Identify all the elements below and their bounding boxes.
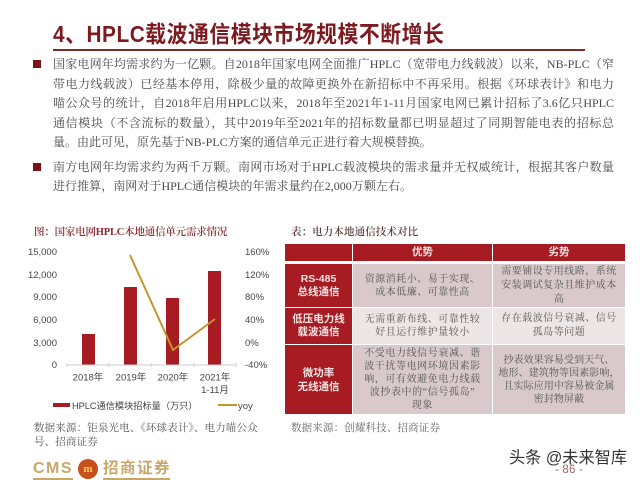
right axis labels: -40% [245, 360, 268, 371]
chart source: 数据来源：钜泉光电、《环球表计》、电力喵公众 [34, 423, 258, 434]
row: RS-485: 成本低廉、可靠性高 [375, 286, 470, 298]
row: micro-power wireless [285, 345, 625, 414]
text block: southern grid demand [33, 160, 614, 193]
row: power line carrier: 存在载波信号衰减、信号 [501, 313, 617, 324]
right axis labels: 160% [245, 247, 270, 258]
header row [285, 244, 625, 261]
right axis labels: 0% [245, 338, 259, 349]
text block: southern grid demand: 进行推算，南网对于HPLC通信模块的年需求量约在2,000万颗左右。 [53, 179, 412, 193]
icon: bullet 2 [33, 163, 41, 171]
row: micro-power wireless: 波抄表中的“信号孤岛” [370, 387, 475, 398]
left axis labels: 3,000 [33, 338, 57, 349]
left axis labels: 9,000 [33, 292, 57, 303]
header row: 劣势 [548, 246, 570, 258]
table source: 数据来源：创耀科技、招商证券 [291, 423, 440, 434]
row: RS-485: 高 [554, 294, 564, 304]
x axis labels: 2018年 [73, 372, 104, 384]
row: RS-485: 安装调试复杂且维护成本 [501, 280, 617, 290]
x axis labels [73, 372, 231, 396]
left axis labels [28, 247, 57, 371]
x axis labels: 2021年 [200, 372, 231, 384]
text block: state grid demand [33, 57, 614, 149]
legend: yoy [238, 401, 253, 412]
logo: CMS: 招商证券 [103, 460, 171, 477]
right axis labels: 40% [245, 315, 265, 326]
row: RS-485: 资源消耗小、易于实现、 [365, 274, 480, 284]
legend: HPLC通信模块招标量（万只） [72, 400, 198, 411]
text block: state grid demand: 国家电网年均需求约为一亿颗。自2018年国家电网全面推广HPLC（宽带电力线载波）以来，NB-PLC（窄 [53, 57, 614, 71]
text block: state grid demand: 量。由此可见，原先基于NB-PLC方案的通信单元正进行着大规模替换。 [53, 135, 432, 149]
chart source: 号、招商证券 [34, 436, 98, 448]
row: power line carrier: 载波通信 [298, 326, 340, 338]
row: micro-power wireless: 且实际应用中容易被金属 [503, 380, 615, 392]
page number: - 86 - [555, 464, 583, 476]
row: micro-power wireless: 抄表效果容易受到天气、 [503, 354, 615, 366]
header row: 优势 [412, 246, 433, 258]
left axis labels: 0 [52, 360, 57, 371]
row: power line carrier: 无需重新布线、可靠性较 [365, 314, 480, 325]
row: power line carrier: 低压电力线 [292, 313, 345, 325]
logo: CMS: CMS [33, 460, 73, 477]
icon: bullet 1 [33, 60, 41, 68]
text block: state grid demand: 通信模块（不含流标的数量），其中2019年至2021年的招标数量都已明显超过了同期智能电表的招标总 [53, 116, 614, 130]
chart source [34, 422, 258, 448]
text block: state grid demand: 喵公众号的统计，自2018年启用HPLC以来，2018年至2021年1-11月国家电网已累计招标了3.6亿只HPLC [53, 96, 614, 110]
row: power line carrier: 好且运行维护量较小 [375, 327, 470, 338]
bars [82, 271, 221, 365]
left axis labels: 6,000 [33, 315, 57, 326]
icon: logo mark: m [83, 463, 93, 475]
table: technology comparison [285, 244, 625, 414]
row: power line carrier [285, 308, 625, 344]
chart heading: 图：国家电网HPLC本地通信单元需求情况 [34, 227, 227, 238]
row: micro-power wireless: 响，可有效避免电力线载 [364, 374, 481, 385]
x axis labels: 1-11月 [201, 385, 229, 396]
row: micro-power wireless: 现象 [412, 400, 433, 411]
left axis labels: 15,000 [28, 247, 57, 258]
right axis labels: 80% [245, 292, 265, 303]
yoy line [130, 255, 215, 350]
row: micro-power wireless: 密封物屏蔽 [534, 394, 584, 404]
row: micro-power wireless: 波干扰等电网环境因素影 [364, 361, 481, 372]
text block: southern grid demand: 南方电网年均需求约为两千万颗。南网市场对于HPLC载波模块的需求量并无权威统计，根据其客户数量 [53, 160, 614, 174]
row: power line carrier: 孤岛等问题 [533, 327, 585, 338]
row: micro-power wireless: 不受电力线信号衰减、谐 [364, 348, 481, 359]
x axis labels: 2019年 [116, 372, 147, 384]
table heading: 表：电力本地通信技术对比 [291, 227, 418, 238]
row: RS-485: RS-485 [301, 272, 336, 284]
watermark: 头条 @未来智库 [509, 449, 627, 467]
bar and line chart [28, 247, 270, 412]
right axis labels [245, 247, 270, 371]
row: RS-485 [285, 264, 625, 307]
icon: logo mark [78, 459, 98, 479]
row: micro-power wireless: 微功率 [303, 366, 334, 378]
left axis labels: 12,000 [28, 270, 57, 281]
row: RS-485: 总线通信 [298, 286, 340, 298]
right axis labels: 120% [245, 270, 270, 281]
row: micro-power wireless: 无线通信 [298, 380, 340, 392]
row: micro-power wireless: 地形、建筑物等因素影响， [498, 368, 620, 378]
title: 4、HPLC载波通信模块市场规模不断增长 [53, 21, 444, 47]
row: RS-485: 需要铺设专用线路，系统 [501, 266, 617, 276]
logo: CMS [33, 459, 171, 480]
legend [53, 400, 253, 412]
x axis labels: 2020年 [158, 372, 189, 384]
text block: state grid demand: 带电力线载波）已经基本停用，除极少量的故障更换外在新招标中不再采用。根据《环球表计》和电力 [53, 77, 614, 91]
